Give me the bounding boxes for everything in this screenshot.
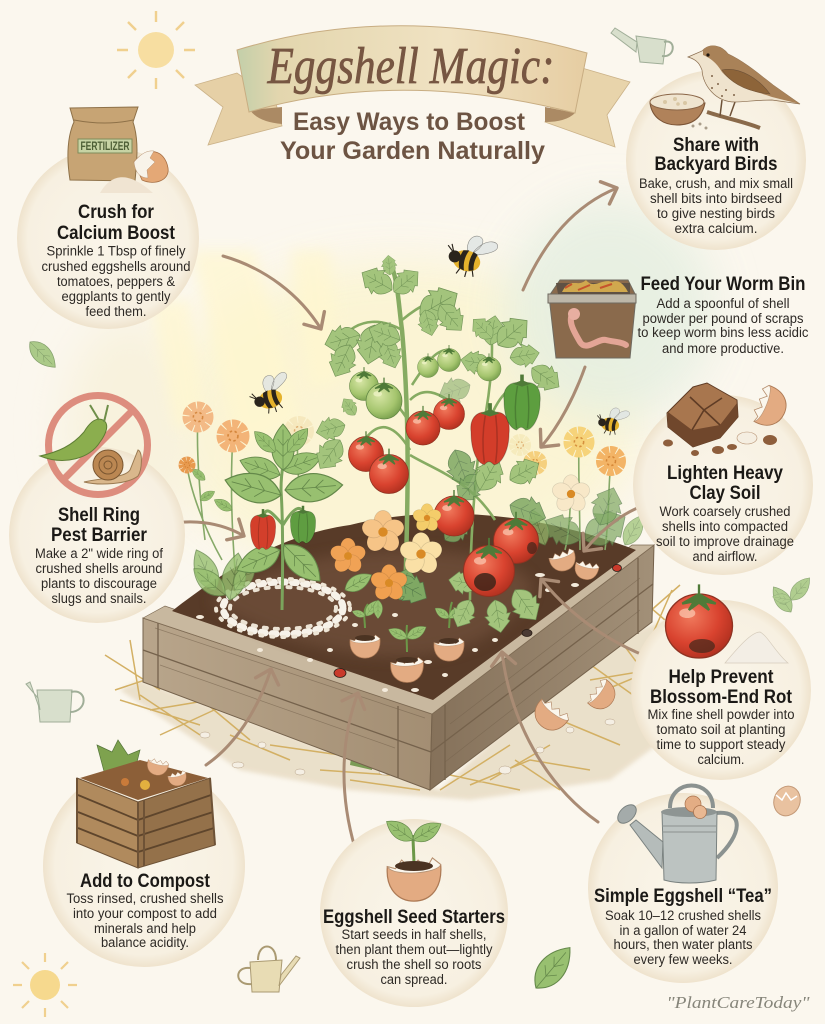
text: worm bin: Feed Your Worm Bin — [640, 274, 806, 295]
text: pest: plants to discourage — [41, 576, 157, 591]
decorative sun bottom left — [13, 953, 77, 1017]
text: birds — [639, 135, 793, 236]
text: compost: Add to Compost — [80, 871, 211, 892]
bees — [245, 229, 630, 438]
text: blossom: tomato soil at planting — [656, 722, 786, 737]
text: pest: Pest Barrier — [51, 525, 148, 546]
eggshells on soil — [548, 548, 600, 582]
icon: compost crate — [77, 740, 215, 868]
panel: add to compost — [43, 740, 245, 967]
ladybugs — [334, 564, 622, 678]
text: blossom: Help Prevent — [668, 667, 774, 688]
panel: feed your worm bin — [548, 274, 809, 358]
text: birds: to give nesting birds — [657, 206, 775, 221]
text: tea: every few weeks. — [634, 952, 732, 967]
text: pest — [35, 505, 163, 606]
text: pest: crushed shells around — [36, 561, 162, 576]
text: seed starters: then plant them out—lightly — [336, 942, 493, 957]
subtitle — [280, 108, 545, 165]
text: seed starters — [323, 907, 505, 987]
text: calcium: Calcium Boost — [57, 223, 176, 244]
icon: clay chunks — [663, 383, 792, 456]
text: worm bin: Add a spoonful of shell — [656, 296, 790, 311]
icon: tomato and powder — [666, 584, 788, 663]
text: pest: Make a 2" wide ring of — [35, 546, 163, 561]
pepper plant — [222, 424, 344, 610]
text: calcium: feed them. — [86, 304, 146, 319]
text: clay: shells into compacted — [662, 519, 788, 534]
text: blossom — [648, 667, 794, 767]
raised garden bed — [105, 514, 690, 800]
subtitle: Your Garden Naturally — [280, 137, 545, 165]
text: clay: and airflow. — [692, 549, 758, 564]
icon: worm bin — [548, 280, 636, 358]
decorative leaves, cans and shell — [24, 336, 815, 996]
flower border back left — [181, 406, 310, 603]
text: calcium: crushed eggshells around — [42, 259, 190, 274]
ground and straw — [105, 585, 690, 800]
panel: shell ring pest barrier — [9, 396, 185, 623]
text: birds: Bake, crush, and mix small — [639, 176, 793, 191]
panel: blossom-end rot — [631, 584, 811, 780]
panel: lighten heavy clay soil — [633, 383, 813, 575]
text: seed starters: Start seeds in half shells, — [342, 927, 486, 942]
scattered shell chips — [196, 573, 579, 692]
text: birds: Backyard Birds — [654, 154, 778, 175]
arrows — [159, 188, 654, 848]
banner — [195, 26, 630, 147]
text: pest: slugs and snails. — [52, 591, 146, 606]
panel: simple eggshell tea — [588, 786, 778, 983]
panel: crush for calcium boost — [17, 107, 199, 329]
text: pest: Shell Ring — [58, 505, 140, 526]
nasturtium flowers — [329, 504, 444, 619]
tomato plant — [309, 255, 566, 635]
text: calcium: tomatoes, peppers & — [57, 274, 175, 289]
text: compost: into your compost to add — [73, 906, 217, 921]
text: blossom: time to support steady — [656, 737, 786, 752]
flower border back right — [512, 431, 649, 556]
text: clay: soil to improve drainage — [656, 534, 794, 549]
text: clay: Clay Soil — [690, 483, 760, 504]
text: calcium: Crush for — [78, 202, 155, 223]
bed faces — [143, 618, 432, 790]
text: tea: hours, then water plants — [614, 937, 753, 952]
icon: fertilizer bag with eggshell: FERTILIZER — [80, 141, 130, 153]
text: birds: shell bits into birdseed — [650, 191, 782, 206]
text: tea: Soak 10–12 crushed shells — [605, 908, 761, 923]
shell ring — [216, 579, 350, 637]
text: worm bin: to keep worm bins less acidic — [638, 325, 809, 340]
text: birds: Share with — [673, 135, 759, 156]
text: compost — [66, 871, 224, 950]
text: seed starters: can spread. — [380, 972, 448, 987]
tomatoes and peppers — [348, 345, 540, 596]
text: blossom: calcium. — [698, 752, 744, 767]
text: seed starters: crush the shell so roots — [346, 957, 482, 972]
subtitle: Easy Ways to Boost — [293, 108, 526, 136]
text: clay — [656, 463, 794, 564]
text: clay: Lighten Heavy — [667, 463, 783, 484]
icon: fertilizer bag with eggshell — [68, 107, 168, 193]
text: seed starters: Eggshell Seed Starters — [323, 907, 505, 928]
text: birds: extra calcium. — [674, 221, 758, 236]
icon: seedling in shell — [382, 815, 445, 901]
banner title: Eggshell Magic: — [267, 38, 554, 95]
decorative sun top left — [117, 11, 195, 89]
text: blossom: Mix fine shell powder into — [648, 707, 794, 722]
text: compost: minerals and help — [94, 921, 196, 936]
text: compost: Toss rinsed, crushed shells — [66, 891, 224, 906]
decorative watering can top right — [611, 28, 673, 64]
signature: "PlantCareToday" — [666, 993, 810, 1012]
text: blossom: Blossom-End Rot — [650, 687, 793, 708]
icon: watering can — [614, 786, 737, 883]
text: worm bin — [638, 274, 809, 356]
soil — [172, 514, 636, 700]
eggshells on the ground — [528, 677, 621, 737]
icon: no slugs and snails — [40, 396, 148, 494]
text: tea: Simple Eggshell “Tea” — [594, 886, 772, 907]
text: tea — [594, 886, 772, 967]
text: worm bin: and more productive. — [662, 341, 784, 356]
panel: share with backyard birds — [626, 46, 806, 250]
text: calcium — [42, 202, 190, 319]
text: clay: Work coarsely crushed — [660, 504, 790, 519]
panel: eggshell seed starters — [320, 815, 508, 1007]
text: tea: in a gallon of water 24 — [620, 923, 747, 938]
text: worm bin: powder per pound of scraps — [642, 311, 804, 326]
eggshell seedlings — [350, 598, 465, 682]
text: compost: balance acidity. — [101, 935, 189, 950]
text: calcium: eggplants to gently — [62, 289, 171, 304]
icon: bird and seed bowl — [650, 46, 800, 130]
text: calcium: Sprinkle 1 Tbsp of finely — [46, 244, 186, 258]
